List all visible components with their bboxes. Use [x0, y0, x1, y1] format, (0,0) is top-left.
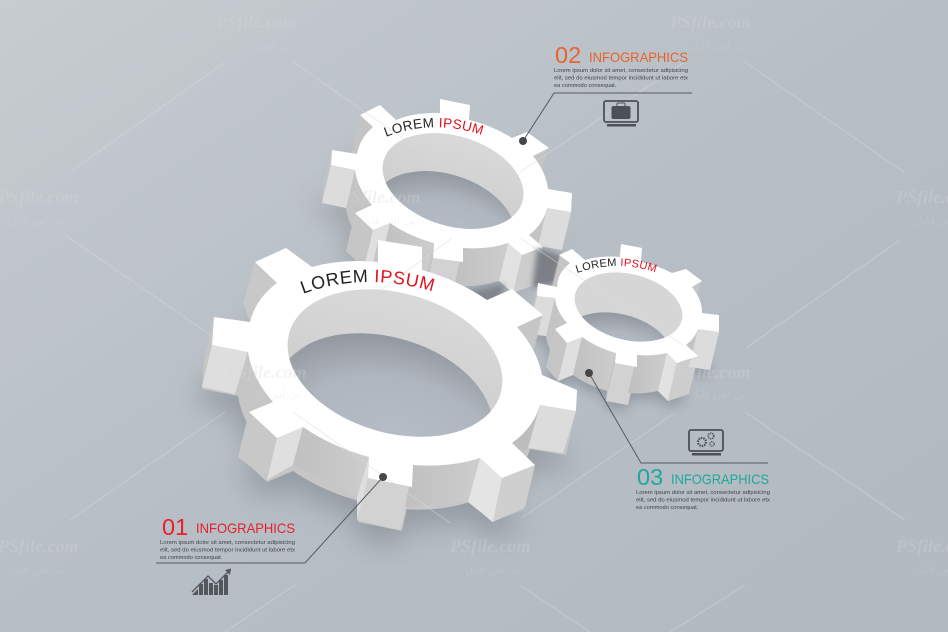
gear 3: small right gear — [532, 244, 719, 414]
text block 02: Lorem ipsum dolor sit amet, consectetur adipisicing — [554, 68, 688, 74]
watermark: PSfile.com — [449, 536, 530, 556]
watermark: PSfile.com — [0, 187, 78, 207]
watermark: پی اس فایل — [465, 563, 521, 576]
watermark: PSfile.com — [0, 536, 78, 556]
watermark: پی اس فایل — [690, 388, 746, 401]
watermark: پی اس فایل — [245, 388, 301, 401]
gear 3 hole — [574, 272, 682, 342]
gear 2: medium top gear — [318, 99, 572, 297]
icon: monitor with gears — [689, 430, 723, 456]
gear 2 hole — [382, 133, 524, 229]
gear 1 label: LOREM IPSUM — [300, 270, 434, 294]
shadow between medium and small gears — [532, 248, 562, 288]
watermark: PSfile.com — [215, 12, 296, 32]
heading 01: 01 — [162, 514, 188, 540]
leader line 01 — [156, 473, 387, 563]
gear 2 shadow — [315, 147, 556, 310]
watermark: PSfile.com — [669, 362, 750, 382]
icon: rising bar chart — [192, 568, 231, 595]
text block 03: ea commodo consequat. — [636, 505, 699, 511]
heading 02 — [555, 42, 688, 68]
text block 01 — [160, 540, 295, 561]
watermark: پی اس فایل — [360, 214, 416, 227]
watermark: PSfile.com — [225, 362, 306, 382]
text block 02: elit, sed do eiusmod tempor incididunt ut labore etx — [554, 76, 688, 82]
text block 02 — [554, 68, 688, 89]
text block 02: ea commodo consequat. — [554, 83, 617, 89]
text block 01: ea commodo consequat. — [160, 555, 223, 561]
gear 3 label: LOREM IPSUM — [576, 258, 657, 273]
watermark: پی اس فایل — [8, 214, 64, 227]
text block 03 — [636, 490, 770, 511]
heading 03: 03 — [637, 464, 663, 490]
gear 3 top face — [537, 244, 719, 367]
callout 02 — [519, 42, 692, 145]
watermark: پی اس فایل — [235, 39, 291, 52]
gear 1: large front gear — [194, 240, 577, 552]
watermark: پی اس فایل — [690, 39, 746, 52]
shadow between medium and large gears — [466, 284, 505, 304]
gear 1 top face — [212, 240, 577, 487]
heading 03 — [637, 464, 769, 490]
callout 01 — [156, 473, 387, 595]
gear 2 top face — [331, 99, 572, 262]
heading 03: INFOGRAPHICS — [671, 471, 769, 487]
heading 01: INFOGRAPHICS — [196, 520, 295, 536]
callout 03 — [585, 369, 770, 511]
heading 02: INFOGRAPHICS — [589, 49, 688, 65]
gear 2 label: LOREM IPSUM — [384, 118, 484, 136]
watermark: پی اس فایل — [8, 563, 64, 576]
text block 01: Lorem ipsum dolor sit amet, consectetur adipisicing — [160, 540, 295, 546]
heading 02: 02 — [555, 42, 581, 68]
leader line 03 — [585, 369, 768, 463]
text block 01: elit, sed do eiusmod tempor incididunt ut labore etx — [160, 548, 295, 554]
gear 1 hole — [288, 289, 502, 437]
gear 2 extruded sides — [322, 103, 571, 300]
gear 1 shadow — [200, 300, 565, 547]
watermark: PSfile.com — [669, 12, 750, 32]
gear 3 extruded sides — [528, 246, 719, 405]
icon: monitor with briefcase — [604, 101, 638, 126]
text block 03: elit, sed do eiusmod tempor incididunt ut labore etx — [636, 498, 770, 504]
leader line 02 — [519, 93, 692, 145]
gear 1 extruded sides — [202, 242, 576, 531]
text block 03: Lorem ipsum dolor sit amet, consectetur adipisicing — [636, 490, 770, 496]
heading 01 — [162, 514, 295, 540]
watermark: PSfile.com — [339, 187, 420, 207]
gear 3 shadow — [527, 288, 709, 411]
